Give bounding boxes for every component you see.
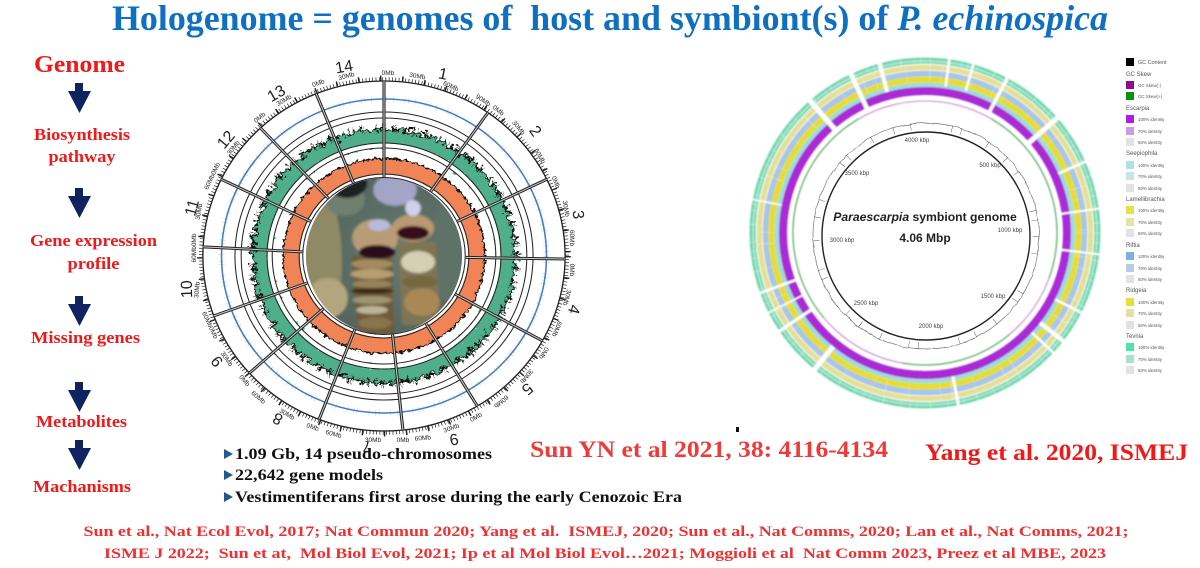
labels: megabase scale: 60Mb0Mb	[203, 161, 222, 191]
legend: genome map: 70% identity	[1138, 357, 1163, 362]
arrow 5	[68, 440, 91, 470]
citation: host genome: Sun YN et al 2021, 38: 4116-4134	[530, 437, 889, 462]
labels: megabase scale: 60Mb	[492, 393, 509, 409]
heading: genome: Genome	[34, 52, 125, 78]
labels: megabase scale: 0Mb	[305, 422, 320, 433]
labels: megabase scale: 0Mb	[237, 374, 251, 388]
legend: genome map: Lamellibrachia	[1126, 197, 1165, 203]
labels: megabase scale: 30Mb	[510, 120, 526, 137]
legend: genome map: 100% identity	[1138, 117, 1165, 122]
labels: megabase scale: 30Mb	[338, 71, 356, 82]
labels: megabase scale: 0Mb	[253, 111, 267, 125]
labels: megabase scale: 0Mb	[537, 346, 550, 360]
legend: genome map: 70% identity	[1138, 311, 1163, 316]
GC content ring	[813, 123, 1039, 349]
labels: megabase scale: 0Mb	[397, 437, 410, 444]
ring: green density	[252, 128, 516, 384]
rings	[200, 78, 568, 434]
legend: genome map: 100% identity	[1138, 208, 1165, 213]
labels: chromosome numbers: 6	[448, 431, 460, 450]
labels: megabase scale: 30Mb	[443, 422, 461, 435]
legend: genome map: GC Skew(-)	[1138, 83, 1161, 88]
legend: genome map: 50% identity	[1138, 186, 1163, 191]
legend: genome map: Tevnia	[1126, 334, 1144, 340]
legend: genome map: GC Skew	[1126, 72, 1152, 78]
references: ISME J 2022; Sun et at, Mol Biol Evol, 2021; Ip et al Mol Biol Evol…2021; Moggioli et al Nat Comm 2023, Preez et al MBE, 2023	[104, 546, 1106, 562]
legend: genome map: Escarpia	[1126, 106, 1150, 112]
labels: megabase scale: 30Mb	[219, 350, 234, 368]
labels: megabase scale: 30Mb	[365, 437, 382, 444]
legend: genome map: 100% identity	[1138, 254, 1165, 259]
step: profile: profile	[68, 254, 120, 273]
map labels: 2500 kbp	[854, 301, 879, 307]
map labels: 1000 kbp	[998, 228, 1023, 234]
labels: megabase scale: 30Mb	[409, 72, 426, 81]
labels: megabase scale: 60Mb0Mb	[191, 233, 198, 262]
step: missing genes: Missing genes	[31, 328, 141, 347]
labels: megabase scale: 60Mb	[550, 320, 563, 338]
legend: genome map: 50% identity	[1138, 277, 1163, 282]
labels: megabase scale: 0Mb	[469, 411, 484, 424]
labels: chromosome numbers	[179, 58, 586, 454]
arrow 4	[68, 382, 91, 412]
labels: megabase scale: 30Mb	[275, 93, 293, 108]
legend: genome map: 50% identity	[1138, 323, 1163, 328]
citation: symbiont genome: Yang et al. 2020, ISMEJ	[925, 440, 1188, 465]
labels: megabase scale: 60Mb	[532, 147, 547, 165]
photo: vestimentiferan tubeworms	[306, 178, 462, 334]
labels: chromosome numbers: 13	[265, 82, 289, 106]
labels: megabase scale: 60Mb	[325, 429, 343, 440]
legend: genome map: 100% identity	[1138, 345, 1165, 350]
key facts	[224, 446, 682, 506]
legend: genome map: GC Skew(+)	[1138, 94, 1163, 99]
track outlines	[203, 81, 565, 431]
legend: genome map: 50% identity	[1138, 231, 1163, 236]
map labels: 4.06 Mbp	[899, 231, 951, 245]
labels: chromosome numbers: 10	[179, 280, 196, 298]
references	[84, 524, 1128, 562]
legend: genome map: Seepiophila	[1126, 151, 1158, 157]
legend: genome map: 100% identity	[1138, 163, 1165, 168]
labels: chromosome numbers: 7	[362, 437, 371, 454]
step: pathway: pathway	[48, 147, 116, 166]
key facts: Vestimentiferans first arose during the early Cenozoic Era	[235, 489, 682, 506]
ring: orange density	[283, 158, 485, 354]
legend: genome map: 70% identity	[1138, 266, 1163, 271]
legend: genome map: 50% identity	[1138, 140, 1163, 145]
step: gene expression: Gene expression	[30, 231, 157, 250]
labels: megabase scale	[191, 70, 575, 444]
map labels: 500 kbp	[979, 163, 1001, 169]
labels: megabase scale: 30Mb	[193, 281, 202, 298]
arrow 3	[68, 296, 91, 326]
arrow 2	[68, 188, 91, 218]
labels: chromosome numbers: 11	[182, 198, 203, 218]
white masks between tracks	[301, 176, 467, 336]
chart: symbiont genome circular map	[750, 57, 1102, 408]
map labels: 1500 kbp	[981, 294, 1006, 300]
labels: chromosome numbers: 5	[518, 379, 536, 398]
legend: genome map: GC Content	[1138, 60, 1167, 66]
labels: chromosome numbers: 8	[270, 408, 286, 428]
map labels: 3000 kbp	[830, 238, 855, 244]
legend: genome map: 50% identity	[1138, 368, 1163, 373]
map labels: 3500 kbp	[845, 171, 870, 177]
small mark	[736, 427, 739, 432]
panel: pathway flow	[30, 52, 157, 496]
legend: genome map: 100% identity	[1138, 300, 1165, 305]
map labels: 2000 kbp	[919, 324, 944, 330]
labels: chromosome numbers: 4	[564, 303, 583, 316]
labels: megabase scale: 0Mb	[568, 264, 575, 277]
labels: megabase scale: 30Mb	[278, 408, 296, 422]
labels: chromosome numbers: 2	[525, 123, 544, 140]
labels: megabase scale: 0Mb	[311, 78, 326, 89]
step: biosynthesis pathway: Biosynthesis	[34, 125, 131, 144]
comparison rings	[750, 57, 1102, 408]
labels: megabase scale: 60Mb	[249, 390, 267, 406]
legend: genome map: 70% identity	[1138, 220, 1163, 225]
key facts: 22,642 gene models	[235, 467, 383, 484]
labels: megabase scale: 60Mb	[568, 230, 575, 247]
labels: megabase scale: 30Mb	[226, 139, 242, 157]
labels: megabase scale: 0Mb	[491, 104, 505, 118]
map labels	[830, 138, 1023, 330]
labels: megabase scale: 0Mb	[382, 70, 395, 77]
labels: megabase scale: 60Mb	[414, 434, 432, 443]
map labels: 4000 kbp	[905, 138, 930, 144]
labels: megabase scale: 0Mb	[550, 175, 561, 190]
labels: megabase scale: 30Mb	[518, 367, 534, 385]
step: metabolites: Metabolites	[36, 412, 128, 431]
labels: megabase scale: 60Mb0Mb	[200, 311, 219, 340]
labels: megabase scale: 30Mb	[195, 203, 204, 220]
labels: chromosome numbers: 3	[569, 209, 586, 220]
key facts: 1.09 Gb, 14 pseudo-chromosomes	[235, 446, 492, 463]
step: machanisms: Machanisms	[33, 477, 132, 496]
scale ticks	[200, 78, 568, 434]
labels: megabase scale: 30Mb	[561, 200, 570, 218]
legend: genome map: Ridgeia	[1126, 288, 1147, 294]
map labels: Paraescarpia symbiont genome	[833, 210, 1017, 224]
legend: genome map	[1126, 58, 1167, 374]
ring: blue signal	[222, 99, 546, 413]
labels: megabase scale: 60Mb	[442, 80, 460, 93]
labels: chromosome numbers: 1	[437, 65, 449, 84]
labels: chromosome numbers: 14	[334, 58, 355, 77]
labels: megabase scale: 30Mb	[561, 289, 572, 307]
chromosome boundaries	[203, 81, 565, 430]
chart: host genome circos plot	[179, 58, 586, 454]
labels: chromosome numbers: 12	[214, 128, 239, 152]
references: Sun et al., Nat Ecol Evol, 2017; Nat Commun 2020; Yang et al. ISMEJ, 2020; Sun et al., Nat Comms, 2020; Lan et al., Nat Comms, 2021;	[84, 524, 1128, 540]
arrow 1	[68, 83, 91, 113]
labels: megabase scale: 90Mb	[474, 93, 492, 108]
labels: chromosome numbers: 9	[208, 352, 227, 370]
legend: genome map: 70% identity	[1138, 174, 1163, 179]
legend: genome map: 70% identity	[1138, 129, 1163, 134]
legend: genome map: Riftia	[1126, 243, 1140, 249]
